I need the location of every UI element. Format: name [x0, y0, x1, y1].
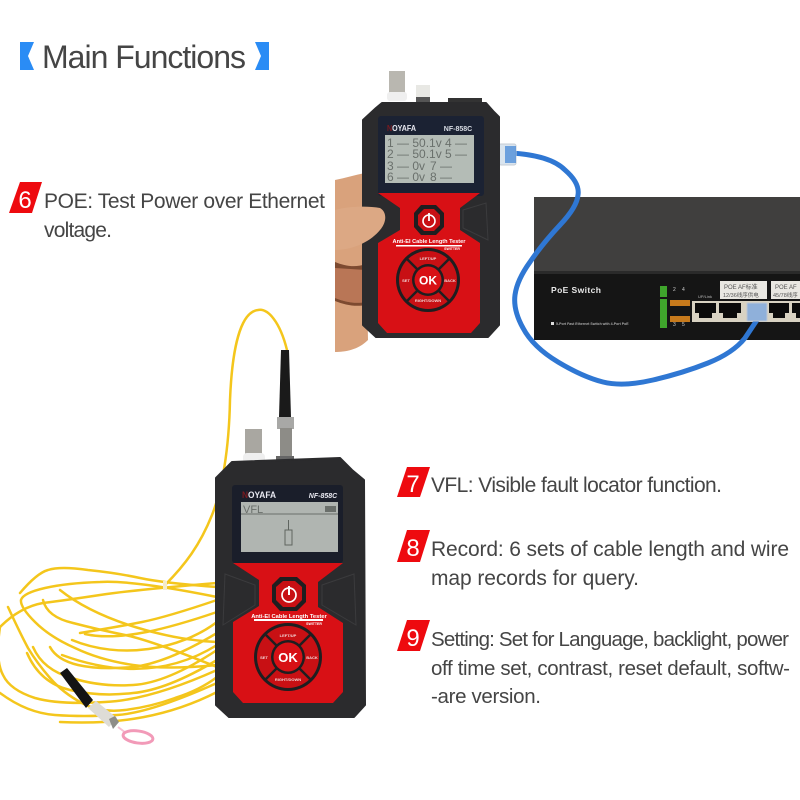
- callout: VFL: [397, 467, 722, 498]
- blue ethernet cable: [499, 144, 767, 384]
- yellow fiber coil: [0, 310, 287, 723]
- port labels: 12/36线序供电: [723, 291, 759, 299]
- callout: VFL: VFL: Visible fault locator function.: [431, 474, 722, 497]
- callout: Setting: -are version.: [431, 685, 541, 708]
- screen bezel: [378, 116, 484, 196]
- callout: POE: 6: [18, 187, 32, 214]
- LCD: voltage readout: [385, 135, 474, 184]
- port labels: 45/78线序: [773, 291, 798, 299]
- photo: PoE switch: [534, 197, 800, 340]
- port labels: [720, 281, 800, 299]
- callout: Record: Record: 6 sets of cable length and wire: [431, 538, 789, 561]
- power button: [414, 205, 444, 235]
- photo: PoE switch: 5-Port Fast Ethernet Switch with 4-Port PoE: [556, 322, 629, 326]
- thumb: [335, 207, 385, 250]
- tester device: VFL mode: Anti-EI Cable Length Tester: [251, 614, 328, 620]
- photo: PoE switch: PoE Switch: [551, 285, 601, 295]
- tester device: PoE mode: Anti-EI Cable Length Tester: [393, 239, 466, 245]
- d-pad: BACK: [444, 278, 456, 283]
- d-pad: LEFT/UP: [420, 256, 437, 261]
- tester device: VFL mode: NOYAFA: [242, 490, 276, 500]
- tester device: VFL mode: [216, 350, 365, 717]
- d-pad: RIGHT/DOWN: [415, 298, 441, 303]
- top connectors: [387, 71, 482, 104]
- callout: POE: [9, 182, 325, 242]
- d-pad: BACK: [306, 655, 318, 660]
- fiber connector and laser spot: [60, 581, 167, 745]
- LCD: voltage readout: 3 — 0v: [387, 159, 425, 173]
- photo: PoE switch: UP/Link: [698, 294, 712, 299]
- ports: [692, 301, 800, 322]
- LCD: voltage readout: 1 — 50.1v 4 —: [387, 136, 467, 150]
- d-pad: SET: [402, 278, 410, 283]
- d-pad: OK: [419, 274, 437, 288]
- callout: Setting: [397, 620, 790, 708]
- callout: Setting: 9: [406, 625, 420, 652]
- red panel: [233, 563, 343, 703]
- top connectors: [243, 350, 336, 464]
- tester device: PoE mode: NF-858C: [444, 126, 472, 133]
- d-pad: SET: [260, 655, 268, 660]
- red panel: [378, 193, 480, 333]
- callout: POE: POE: Test Power over Ethernet: [44, 190, 325, 213]
- tester device: PoE mode: NOYAFA: [387, 124, 416, 133]
- port labels: POE AF: [775, 285, 797, 291]
- callout: Record: [397, 530, 789, 590]
- callout: Setting: Setting: Set for Language, backlight, power: [431, 628, 789, 651]
- callout: Setting: off time set, contrast, reset default, softw-: [431, 657, 790, 680]
- tester device: PoE mode: [363, 71, 499, 337]
- title: Main Functions: [42, 39, 246, 75]
- hand holding tester: [335, 173, 368, 352]
- body: [216, 458, 365, 717]
- callout: Record: map records for query.: [431, 567, 639, 590]
- photo: PoE switch: 3: [673, 322, 676, 328]
- d-pad: [396, 248, 460, 312]
- LCD: voltage readout: 6 — 0v: [387, 170, 425, 184]
- d-pad: [254, 623, 322, 691]
- d-pad: RIGHT/DOWN: [275, 677, 301, 682]
- LCD: VFL readout: VFL: [243, 504, 263, 516]
- callout: Record: 8: [406, 535, 420, 562]
- callout: VFL: 7: [406, 471, 420, 498]
- tester device: VFL mode: NF-858C: [309, 493, 338, 500]
- power button: [272, 577, 306, 611]
- body: [363, 103, 499, 337]
- LCD: voltage readout: 8 —: [430, 170, 452, 184]
- LCD: voltage readout: 2 — 50.1v 5 —: [387, 147, 467, 161]
- tester device: PoE mode: SWITTER: [444, 247, 460, 251]
- LCD: VFL readout: [241, 502, 338, 552]
- screen bezel: [232, 485, 343, 563]
- photo: PoE switch: 2: [673, 287, 676, 293]
- photo: PoE switch: 5: [682, 322, 685, 328]
- d-pad: LEFT/UP: [280, 633, 297, 638]
- callout: POE: voltage.: [44, 219, 112, 242]
- tester device: VFL mode: SWITTER: [306, 622, 322, 626]
- LCD: voltage readout: 7 —: [430, 159, 452, 173]
- d-pad: OK: [278, 650, 298, 665]
- photo: PoE switch: 4: [682, 287, 685, 293]
- port labels: POE AF标准: [724, 283, 758, 291]
